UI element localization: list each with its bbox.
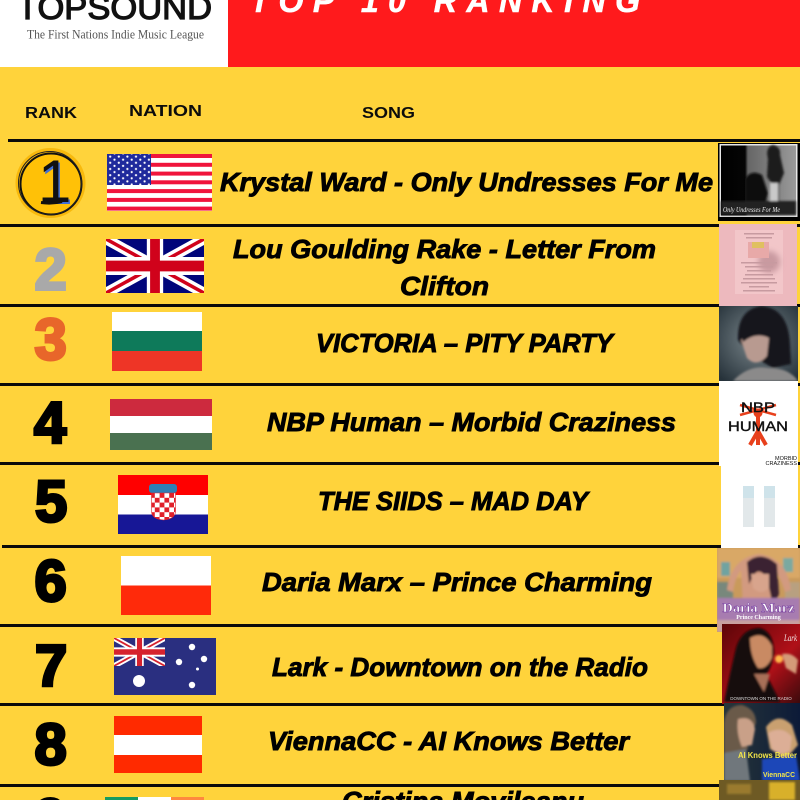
song title: Daria Marx – Prince Charming [262, 567, 652, 597]
row 8 [34, 703, 800, 781]
row 1 [16, 143, 800, 221]
coat of arms [149, 484, 177, 520]
column headings [25, 103, 415, 122]
flag: Croatia [118, 475, 208, 534]
album cover: Morbid Craziness: NBP [741, 399, 775, 415]
row 6 [34, 548, 800, 632]
album cover: AI Knows Better: AI Knows Better [738, 751, 797, 760]
album cover: Only Undresses For Me [718, 143, 800, 221]
row 3 [34, 306, 798, 381]
rank 3: 3 [34, 308, 67, 372]
song title: Krystal Ward - Only Undresses For Me [220, 167, 713, 197]
flag: Ireland [105, 797, 204, 800]
album cover: Prince Charming [717, 548, 800, 632]
song title: Lark - Downtown on the Radio [272, 652, 648, 682]
rank 1 medal: 1 [38, 148, 71, 215]
song title: ViennaCC - AI Knows Better [268, 726, 631, 756]
album cover: Letter From Clifton [719, 224, 797, 306]
rank 4: 4 [34, 390, 66, 456]
row 9 [34, 780, 800, 800]
flag: Austria [114, 716, 202, 773]
heading: rank: RANK [25, 105, 78, 122]
header: title banner [228, 0, 800, 67]
flag: United Kingdom [106, 239, 204, 293]
rank 2: 2 [34, 238, 67, 302]
flag: Poland [121, 556, 211, 615]
song title: Clifton [400, 271, 489, 301]
rank 1 medal [16, 148, 86, 218]
album cover: Prince Charming: Prince Charming [736, 615, 781, 621]
song title [233, 234, 656, 301]
album cover: row 9 [719, 780, 800, 800]
album cover: Morbid Craziness [719, 381, 798, 467]
album cover: Pity Party [719, 306, 798, 381]
heading: nation: NATION [129, 103, 202, 120]
rank 6: 6 [34, 549, 67, 614]
rank 8: 8 [34, 712, 67, 778]
song title: NBP Human – Morbid Craziness [267, 407, 676, 437]
header: logo panel [0, 0, 228, 67]
flag: Hungary [110, 399, 212, 450]
heading: song: SONG [362, 105, 415, 122]
album cover: Morbid Craziness: HUMAN [728, 418, 788, 434]
album cover: Prince Charming: Daria Marz [722, 600, 795, 615]
song title: THE SIIDS – MAD DAY [318, 486, 591, 516]
album cover: Mad Day [721, 466, 798, 548]
rank 5: 5 [35, 470, 67, 534]
row 5 [35, 465, 798, 548]
album cover: AI Knows Better [724, 703, 800, 780]
album cover: AI Knows Better: ViennaCC [763, 772, 795, 779]
row 7 [35, 624, 800, 704]
row 4 [34, 381, 798, 467]
rank 7: 7 [35, 634, 67, 698]
album cover: Downtown on the Radio [722, 624, 800, 704]
song title: Lou Goulding Rake - Letter From [233, 234, 656, 264]
row 2 [34, 224, 797, 306]
album cover: Downtown on the Radio: DOWNTOWN ON THE RADIO [730, 696, 792, 701]
album cover: Morbid Craziness: CRAZINESS [766, 461, 797, 467]
flag: Australia [114, 638, 216, 695]
logo tagline: The First Nations Indie Music League [27, 26, 204, 42]
flag: Bulgaria [112, 312, 202, 371]
song title: VICTORIA – PITY PARTY [316, 328, 616, 358]
album cover: Morbid Craziness: MORBID [775, 456, 797, 462]
album cover: Only Undresses For Me: Only Undresses For Me [723, 205, 781, 214]
rank 1 medal: 1 [40, 150, 73, 217]
flag: United States [107, 154, 212, 211]
